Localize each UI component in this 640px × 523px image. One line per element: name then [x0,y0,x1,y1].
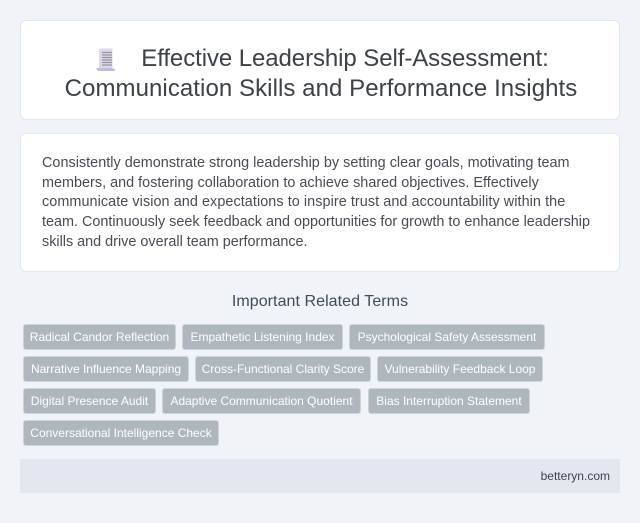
tag: Digital Presence Audit [31,394,148,408]
tag [182,324,343,350]
footer: site name: betteryn.com [541,469,610,483]
heading: related terms: Important Related Terms [232,293,408,310]
tag: Cross-Functional Clarity Score [202,362,364,376]
description text: team. Continuously seek feedback and opportunities for growth to enhance leadership [42,214,590,230]
title: Effective Leadership Self-Assessment: [141,45,549,72]
tag: Psychological Safety Assessment [358,330,536,344]
tag: Radical Candor Reflection [30,330,169,344]
tag [162,388,361,414]
description text: members, and fostering collaboration to achieve shared objectives. Effectively [42,175,539,191]
description text: communicate vision and expectations to inspire trust and accountability within the [42,194,565,210]
tag: Conversational Intelligence Check [30,426,212,440]
tag [23,356,189,382]
description text: Consistently demonstrate strong leadership by setting clear goals, motivating team [42,155,570,171]
icon: document scroll [96,48,115,71]
panel: description [20,133,620,272]
tag: Empathetic Listening Index [190,330,335,344]
tag [23,388,156,414]
tag [23,324,176,350]
tag [377,356,543,382]
description text: skills and drive overall team performance. [42,234,308,250]
panel: header [20,20,620,120]
tag [368,388,530,414]
tag [23,420,219,446]
panel: term tags [23,324,545,446]
title [65,45,577,102]
tag [349,324,545,350]
tag: Bias Interruption Statement [376,394,522,408]
footer bar [20,459,620,493]
tag: Vulnerability Feedback Loop [384,362,535,376]
description text [42,155,590,250]
tag: Narrative Influence Mapping [31,362,181,376]
title: Communication Skills and Performance Insights [65,75,577,102]
tag: Adaptive Communication Quotient [170,394,353,408]
tag [195,356,371,382]
